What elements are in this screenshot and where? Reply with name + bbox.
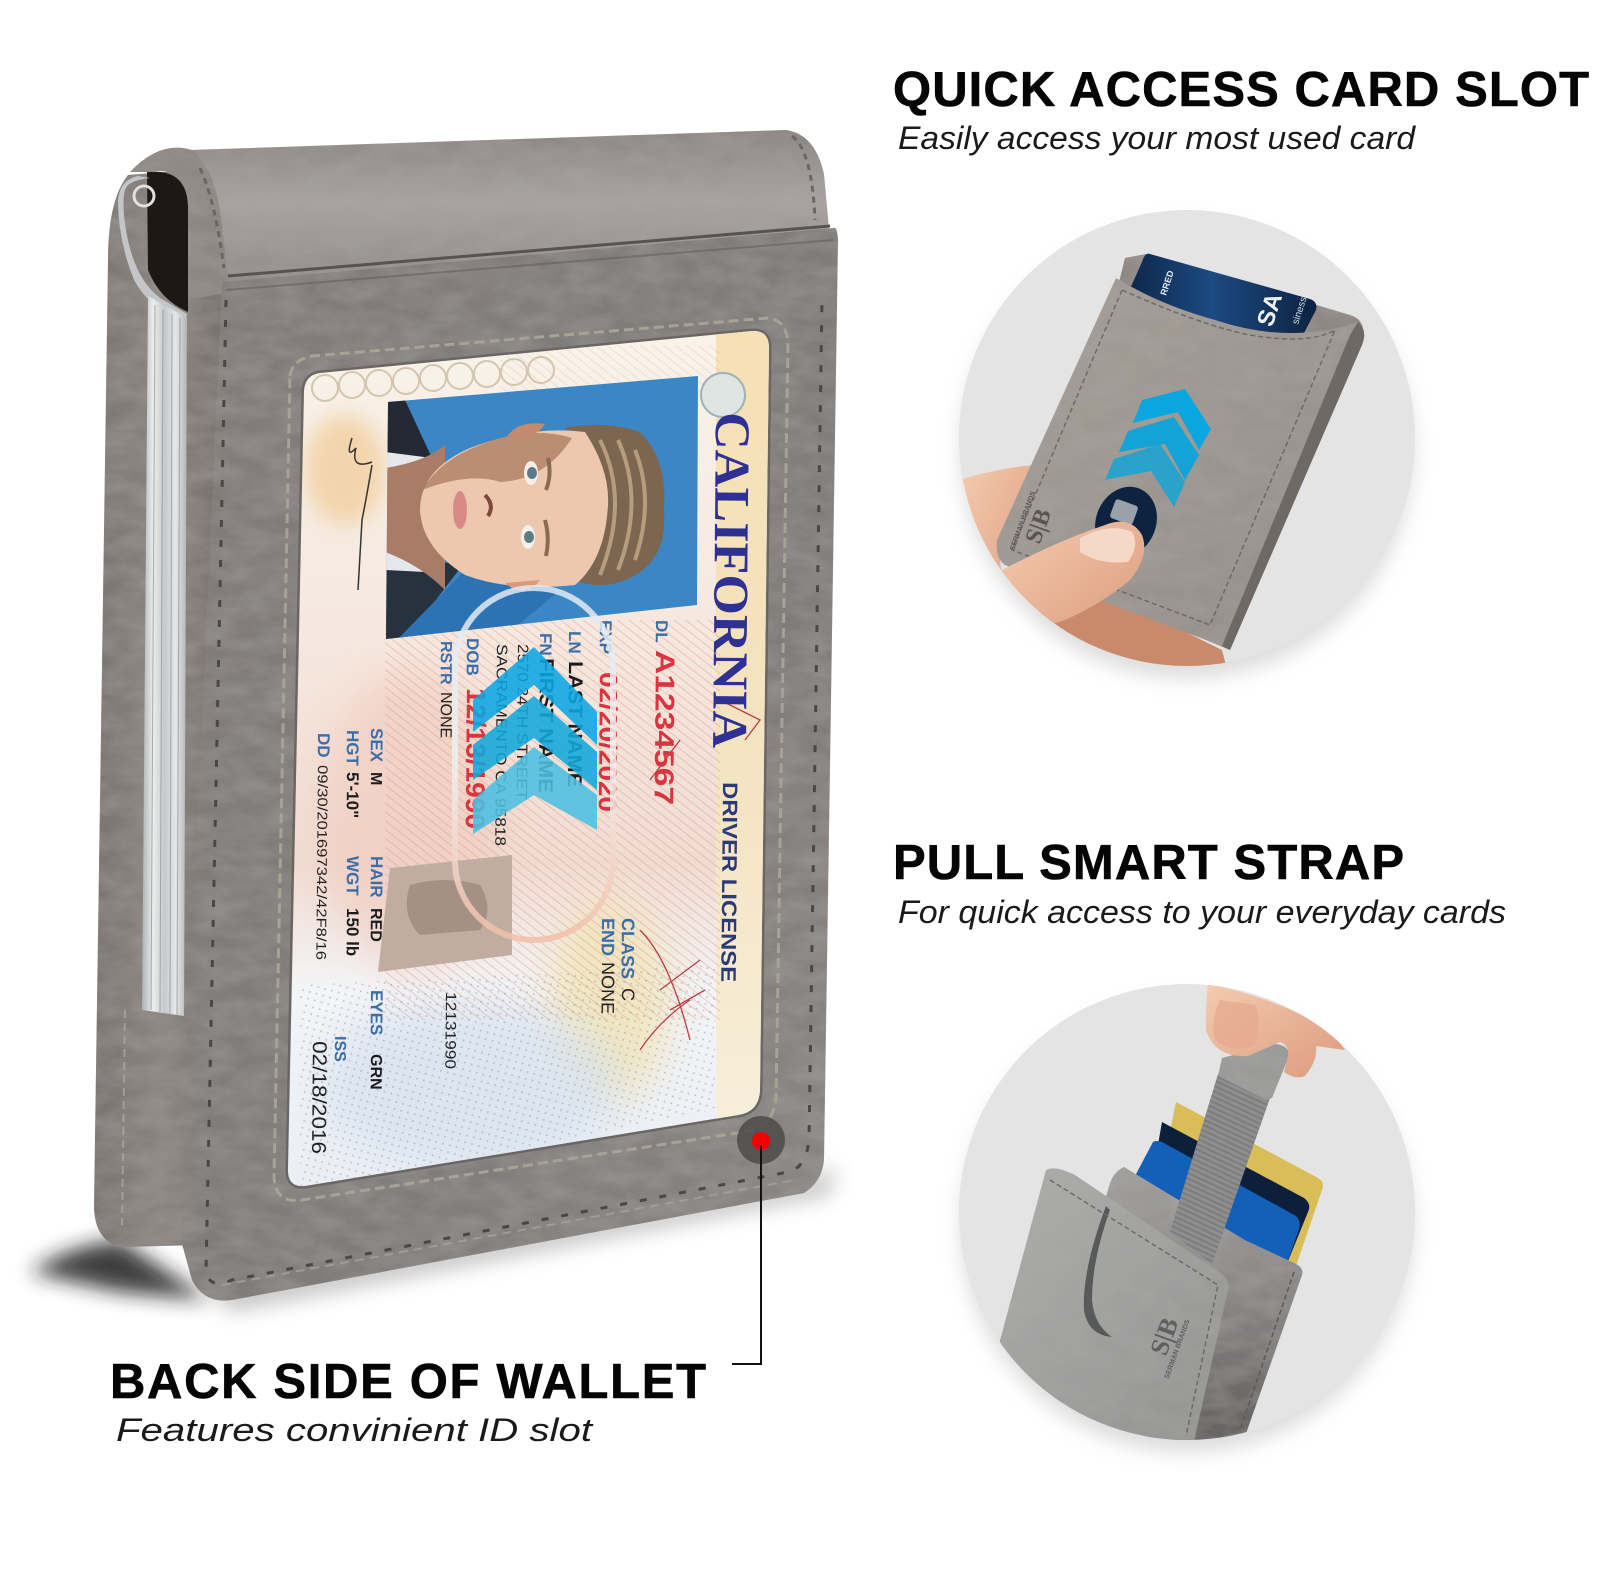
brand emboss: S|B [1021, 506, 1057, 547]
heading: quick access card slot [893, 63, 1589, 156]
money clip [118, 172, 188, 320]
ID card text: DL [652, 620, 671, 643]
callout marker [732, 1116, 785, 1364]
flap [190, 130, 830, 290]
panel: quick access circle: SA [1252, 290, 1288, 330]
ID card text: END [598, 918, 618, 956]
brand emboss: S|B [1144, 1314, 1184, 1359]
circle shadow [961, 1000, 1413, 1452]
heading: back side of wallet: Features convinient ID slot [116, 1412, 593, 1448]
window shadow rim [288, 331, 769, 1186]
front panel [182, 228, 838, 1301]
heading: back side of wallet: BACK SIDE OF WALLET [110, 1355, 706, 1409]
main wallet illustration [30, 130, 838, 1364]
dot screen [300, 965, 715, 1190]
brand emboss: SERMAN BRANDS [1009, 490, 1037, 551]
panel: quick access circle: siness [1290, 296, 1310, 326]
sweater [399, 573, 555, 638]
ID card text: NONE [598, 962, 618, 1014]
ID card text: FIRST NAME [534, 658, 557, 793]
finger hole with card [1085, 477, 1167, 567]
ID card text: 12/13/1990 [460, 688, 491, 829]
ID card text: M [367, 772, 384, 785]
ID card text [307, 412, 761, 1154]
left curve of flap [130, 148, 230, 300]
ear [505, 423, 545, 440]
finger slot crease [1084, 1206, 1112, 1337]
cash stack [142, 296, 187, 1016]
blue card [1135, 1141, 1300, 1266]
face [420, 430, 608, 587]
heading: pull smart strap: For quick access to your everyday cards [898, 894, 1506, 930]
jacket [385, 400, 432, 458]
blue chevrons [1105, 389, 1211, 507]
strap tab [1218, 1044, 1289, 1100]
card base [280, 320, 780, 1200]
heading: quick access card slot: Easily access your most used card [898, 120, 1416, 156]
ID card text: 5'-10" [343, 772, 362, 818]
ID card text: SACRAMENTO CA 95818 [491, 644, 510, 846]
stitches [1012, 290, 1335, 625]
ID card text: EXP [596, 620, 615, 654]
back wallet panel [1090, 254, 1364, 650]
spine pale stitching [122, 1010, 125, 1225]
ID card text: NONE [437, 692, 454, 738]
spine edge [1222, 322, 1364, 650]
security tint blobs [305, 415, 385, 525]
circle background [959, 210, 1415, 666]
neck [385, 445, 445, 590]
ID card text: GRN [367, 1054, 384, 1090]
card in top slot [1125, 254, 1316, 360]
lower stitch line [222, 1180, 795, 1285]
panel edge highlight [228, 226, 830, 276]
ID card text: WGT [343, 856, 362, 896]
panel: pull strap circle [959, 984, 1415, 1452]
wallet ground shadow left [30, 1240, 210, 1300]
heading: back side of wallet [110, 1355, 706, 1448]
flap stitching [200, 136, 815, 268]
ID card text: HAIR [367, 856, 386, 898]
eyes [524, 461, 538, 485]
face shadow [422, 433, 572, 490]
ID card text: RED [367, 908, 384, 942]
ID card text: 09/30/201697342/42F8/16 [313, 765, 331, 960]
ID card text: DOB [463, 638, 482, 676]
yellow right band [716, 331, 769, 1119]
ID card text: 12131990 [441, 992, 459, 1069]
circle background [959, 984, 1415, 1440]
panel: quick access circle [959, 210, 1415, 700]
wallet front [997, 278, 1358, 646]
heading: pull smart strap [893, 836, 1506, 930]
ID card text: C [618, 988, 638, 1001]
flap stitching [1050, 1180, 1218, 1436]
signature [349, 438, 372, 590]
wallet spine and rear panel [94, 170, 230, 1247]
brand emboss [1137, 1309, 1192, 1380]
panel: quick access circle: RRED [1158, 269, 1176, 297]
ID card text: DD [314, 733, 333, 758]
nose [485, 495, 491, 516]
ID card text: 02/20/2020 [593, 672, 622, 812]
window stitching [274, 318, 788, 1201]
ID card text: CLASS [617, 918, 638, 979]
transparent chevrons on ID [473, 647, 597, 834]
ID card text: LN [565, 631, 584, 654]
guilloche lines [385, 620, 720, 1020]
ID card text: HGT [343, 730, 362, 767]
ID card text: EYES [367, 990, 386, 1035]
front wallet panel [960, 1168, 1228, 1450]
heading: quick access card slot: QUICK ACCESS CARD SLOT [893, 63, 1589, 117]
ID card text: CALIFORNIA [702, 412, 761, 748]
fingers [1206, 984, 1345, 1077]
ID card [280, 320, 780, 1200]
lower hand [1010, 590, 1235, 700]
ID card text: 150 lb [343, 908, 362, 956]
back wallet panel [1060, 1167, 1302, 1442]
ID card text: SEX [367, 728, 386, 763]
hair [565, 425, 664, 585]
ID card text: ISS [331, 1036, 348, 1062]
lips [453, 491, 467, 529]
rosette row [312, 357, 554, 401]
heading: pull smart strap: PULL SMART STRAP [893, 836, 1404, 890]
seal [701, 373, 745, 417]
ghost portrait [378, 855, 512, 972]
ID card text: DRIVER LICENSE [716, 782, 741, 982]
palm [960, 465, 1032, 640]
eyebrows [545, 458, 550, 556]
wallet ground shadow bottom [210, 1165, 835, 1312]
strap [1170, 1074, 1270, 1264]
brand emboss [1009, 490, 1062, 560]
nail [1213, 1000, 1258, 1049]
outer stitching [206, 300, 822, 1283]
collar [386, 452, 426, 572]
brand emboss: SERMAN BRANDS [1164, 1319, 1192, 1380]
circle shadow [961, 226, 1413, 678]
navy card [1150, 1122, 1309, 1266]
ID card text: 02/18/2016 [307, 1041, 330, 1154]
ID card text: LAST NAME [563, 661, 586, 787]
ID card text: RSTR [437, 641, 454, 685]
portrait photo [380, 370, 705, 645]
ID card text: A1234567 [649, 650, 680, 805]
ID card text: 2570 24TH STREET [513, 644, 531, 800]
ID card text: FN [536, 633, 555, 656]
thumbnail [1080, 528, 1135, 563]
map outline [640, 700, 760, 1050]
gold card [1160, 1102, 1323, 1266]
transparent finger ring [455, 588, 613, 940]
thumb [1000, 522, 1144, 640]
